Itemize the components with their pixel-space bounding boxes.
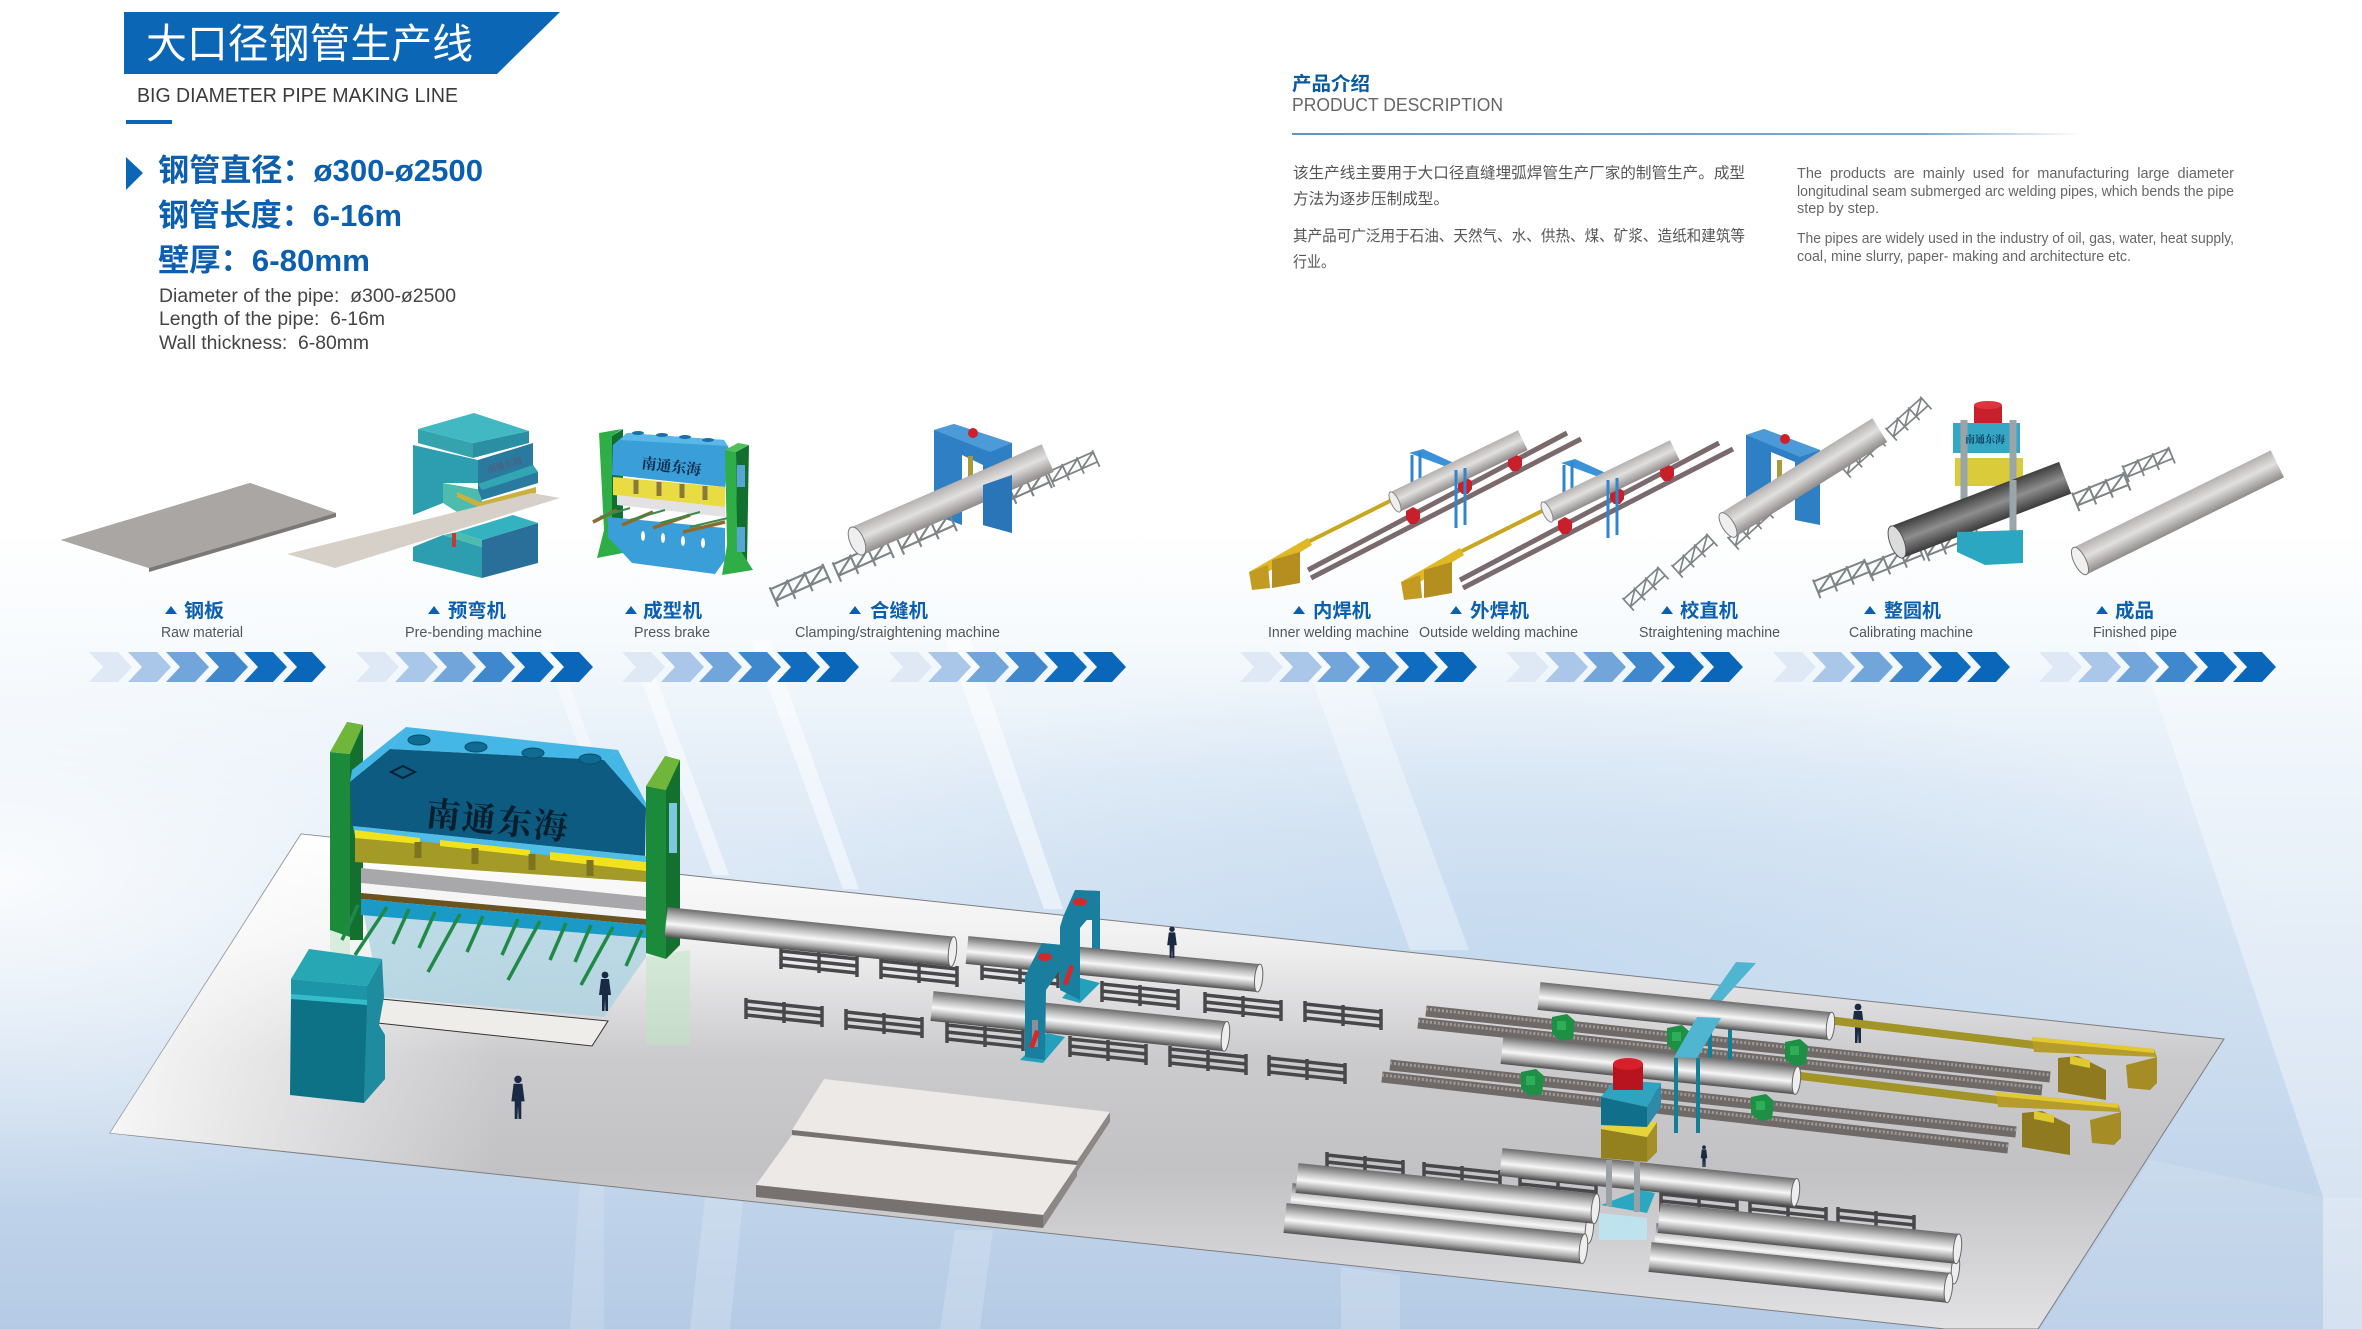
accent rule <box>126 120 172 124</box>
icon: outside welding machine <box>1401 440 1733 600</box>
step labels: 外焊机 <box>1470 600 1529 622</box>
step labels: Finished pipe <box>2093 625 2177 641</box>
specifications: Diameter of the pipe: ø300-ø2500 <box>159 286 456 307</box>
icon: press brake <box>593 429 753 575</box>
outside welding unit <box>1792 1075 2121 1155</box>
title banner: 大口径钢管生产线 <box>146 21 473 67</box>
step labels <box>161 599 2177 641</box>
icon: pre-bending machine: 南通东海 <box>485 453 523 476</box>
step labels: Outside welding machine <box>1419 625 1578 641</box>
icon: clamping machine <box>770 424 1100 607</box>
step labels: 内焊机 <box>1313 600 1371 622</box>
specifications: 钢管直径：ø300-ø2500 <box>158 153 483 188</box>
icon: pre-bending machine <box>287 413 560 578</box>
step labels: Calibrating machine <box>1849 625 1973 641</box>
step labels: 钢板 <box>184 600 224 622</box>
icon: inner welding machine <box>1249 430 1581 590</box>
product description: The pipes are widely used in the industry of oil, gas, water, heat supply, <box>1797 230 2234 247</box>
calibrating pipe <box>1500 1148 1801 1207</box>
welding pipe front <box>1501 1036 1802 1095</box>
icon: calibrating machine: 南通东海 <box>1965 431 2005 446</box>
step labels: 预弯机 <box>448 599 506 622</box>
clamping machine rear head <box>1075 890 1100 960</box>
icon: press brake: 南通东海 <box>640 452 703 480</box>
pipe stack left <box>1283 1163 1601 1264</box>
calibrating press <box>1599 1058 1661 1240</box>
chevron arrows <box>89 652 2276 682</box>
product description <box>1292 73 2234 271</box>
pipe stack right <box>1648 1203 1963 1303</box>
product description: longitudinal seam submerged arc welding pipes, which bends the pipe <box>1797 183 2234 200</box>
icon: calibrating machine <box>1813 401 2175 598</box>
welding rollers <box>1521 1014 1808 1121</box>
step labels: 整圆机 <box>1884 600 1941 622</box>
icon: finished pipe <box>2068 450 2284 577</box>
specifications: Length of the pipe: 6-16m <box>159 309 385 330</box>
product description: 其产品可广泛用于石油、天然气、水、供热、煤、矿浆、造纸和建筑等 <box>1293 227 1745 245</box>
title banner <box>124 12 560 74</box>
step labels: 成品 <box>2115 599 2154 622</box>
specifications: 壁厚：6-80mm <box>158 243 370 278</box>
specifications: 钢管长度：6-16m <box>158 198 402 233</box>
control cabinet <box>290 949 385 1103</box>
step labels: 合缝机 <box>870 600 928 622</box>
specifications: Wall thickness: 6-80mm <box>159 333 369 354</box>
product description: 行业。 <box>1293 253 1335 271</box>
subtitle: BIG DIAMETER PIPE MAKING LINE <box>137 85 458 107</box>
welding pipe rear <box>1538 982 1836 1040</box>
clamping machines <box>1020 890 1100 1063</box>
step labels: Clamping/straightening machine <box>795 625 1000 641</box>
pipe from press <box>664 907 958 967</box>
inner welding unit <box>1828 1020 2157 1100</box>
clamping pipes <box>930 936 1264 1052</box>
product description: PRODUCT DESCRIPTION <box>1292 95 1503 115</box>
product description: step by step. <box>1797 200 1879 217</box>
step labels: Raw material <box>161 625 243 641</box>
blue gantry rear <box>1708 962 1756 1062</box>
welding rails <box>1382 1009 2050 1148</box>
main press brake: 南通东海 <box>424 786 572 850</box>
icon: straightening machine <box>1622 397 1932 611</box>
specifications <box>126 153 483 354</box>
blue gantry front <box>1674 1017 1721 1133</box>
step labels: 校直机 <box>1680 599 1738 622</box>
main press brake <box>330 722 690 1045</box>
factory floor <box>110 834 2224 1329</box>
product description: The products are mainly used for manufacturing large diameter <box>1797 165 2234 182</box>
workers <box>511 926 1864 1167</box>
step labels: Straightening machine <box>1639 625 1780 641</box>
pipe supports <box>746 948 1914 1236</box>
product description: 方法为逐步压制成型。 <box>1293 190 1449 208</box>
product description: coal, mine slurry, paper- making and architecture etc. <box>1797 248 2131 265</box>
step labels: Press brake <box>634 625 710 641</box>
plate on press <box>377 999 608 1046</box>
step labels: 成型机 <box>643 599 702 622</box>
step labels: Pre-bending machine <box>405 625 542 641</box>
product description: 产品介绍 <box>1292 73 1370 95</box>
step labels: Inner welding machine <box>1268 625 1409 641</box>
product description: 该生产线主要用于大口径直缝埋弧焊管生产厂家的制管生产。成型 <box>1293 164 1745 182</box>
steel plates on floor <box>756 1079 1110 1228</box>
icon: steel plate <box>61 483 336 572</box>
